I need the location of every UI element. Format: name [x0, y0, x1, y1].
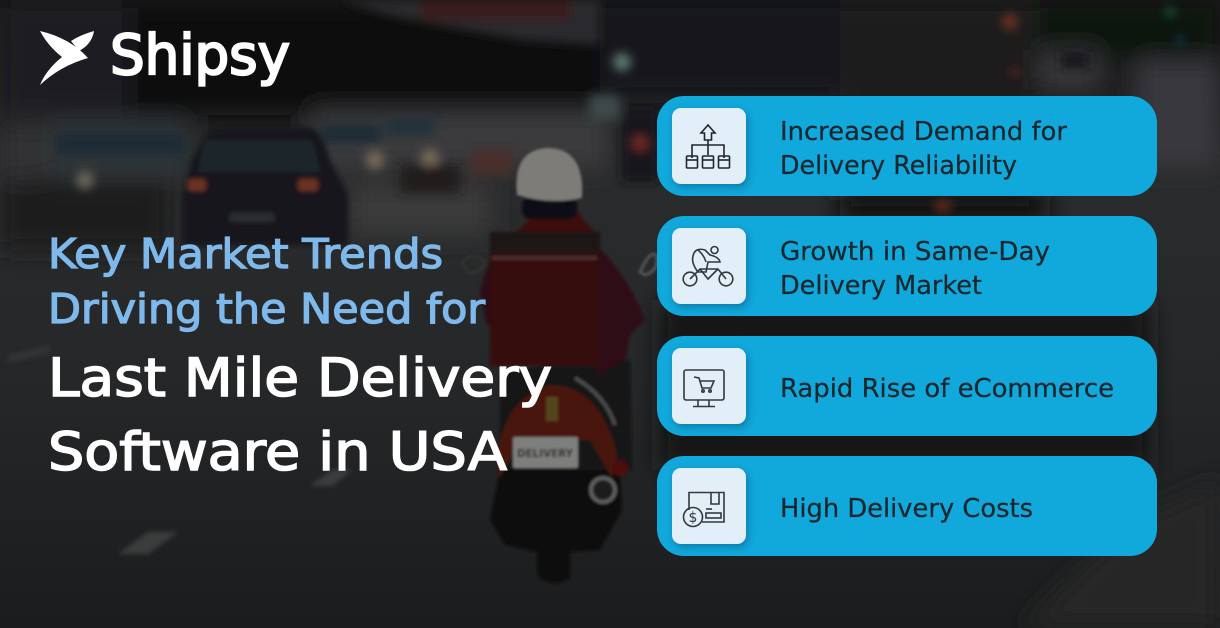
panel: Rapid Rise of eCommerce — [657, 336, 1157, 436]
panel: Increased Demand for Delivery Reliability — [657, 96, 1157, 196]
card text: Delivery Market — [780, 271, 982, 301]
logo wordmark: Shipsy — [110, 23, 290, 87]
title — [48, 230, 552, 483]
title line: Last Mile Delivery: Last Mile Delivery — [48, 348, 552, 409]
logo: Shipsy — [40, 23, 290, 87]
card text — [780, 117, 1067, 181]
icon: parcel with dollar coin — [672, 468, 746, 544]
card text — [780, 237, 1050, 301]
card text: Rapid Rise of eCommerce — [780, 374, 1114, 404]
title line: Driving the Need for: Driving the Need for — [48, 285, 485, 333]
icon: packages hierarchy — [672, 108, 746, 184]
icon: parcel with dollar coin: $ — [689, 510, 697, 526]
title line: Software in USA: Software in USA — [48, 422, 507, 483]
rider on scooter photo: DELIVERY — [517, 447, 574, 460]
road markings — [8, 345, 352, 554]
icon: couple on bicycle — [672, 228, 746, 304]
card text: Increased Demand for — [780, 117, 1067, 147]
card text: Delivery Reliability — [780, 151, 1017, 181]
icon: monitor with cart — [672, 348, 746, 424]
card text: High Delivery Costs — [780, 494, 1033, 524]
panel: High Delivery Costs — [657, 456, 1157, 556]
card text: Growth in Same-Day — [780, 237, 1050, 267]
car — [183, 128, 348, 245]
rider on scooter photo — [462, 148, 657, 583]
icon: Shipsy mark — [40, 31, 94, 85]
panel: Growth in Same-Day Delivery Market — [657, 216, 1157, 316]
title line: Key Market Trends: Key Market Trends — [48, 230, 443, 278]
